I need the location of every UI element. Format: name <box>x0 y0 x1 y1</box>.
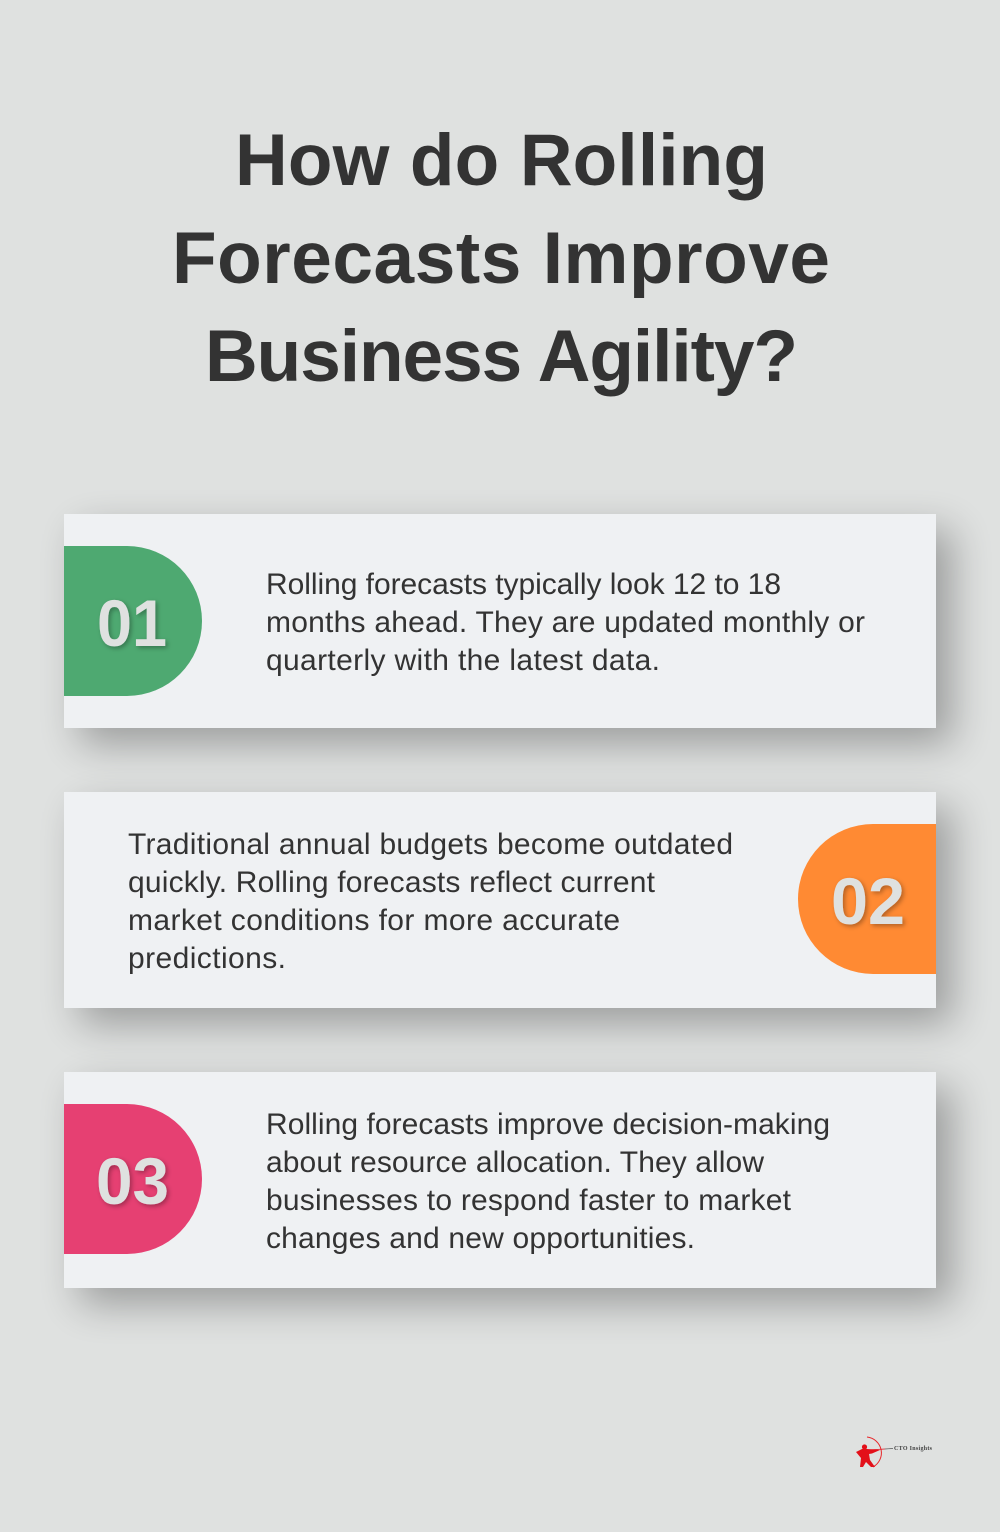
icon: archer <box>856 1437 893 1467</box>
text: card 02 body: predictions. <box>128 942 286 975</box>
logo: CTO Insights: CTO Insights <box>894 1446 933 1452</box>
text: card 03 body: changes and new opportunities. <box>266 1222 695 1255</box>
text: card 01 body: months ahead. They are updated monthly or <box>266 606 865 639</box>
text: card 01 body <box>266 568 865 677</box>
badge: 03: 03 <box>96 1144 169 1218</box>
badge: 01 <box>64 546 202 696</box>
text: card 01 body: Rolling forecasts typically look 12 to 18 <box>266 568 781 601</box>
panel: card 01 <box>64 514 952 744</box>
text: card 03 body: about resource allocation. They allow <box>266 1146 764 1179</box>
badge: 03 <box>64 1104 202 1254</box>
text: card 01 body: quarterly with the latest data. <box>266 644 660 677</box>
text: card 02 body: Traditional annual budgets become outdated <box>128 828 733 861</box>
text: card 03 body: Rolling forecasts improve decision-making <box>266 1108 830 1141</box>
text: card 03 body <box>266 1108 830 1255</box>
logo: CTO Insights <box>856 1437 933 1467</box>
title: Business Agility? <box>205 316 798 397</box>
title <box>172 120 830 397</box>
text: card 03 body: businesses to respond faster to market <box>266 1184 792 1217</box>
title: Forecasts Improve <box>172 218 830 299</box>
badge: 01: 01 <box>97 586 167 660</box>
badge: 02 <box>798 824 936 974</box>
title: How do Rolling <box>235 120 768 201</box>
badge: 02: 02 <box>831 864 905 938</box>
panel: card 02 <box>64 792 952 1024</box>
text: card 02 body: quickly. Rolling forecasts reflect current <box>128 866 656 899</box>
text: card 02 body: market conditions for more accurate <box>128 904 620 937</box>
panel: card 03 <box>64 1072 952 1304</box>
text: card 02 body <box>128 828 733 975</box>
